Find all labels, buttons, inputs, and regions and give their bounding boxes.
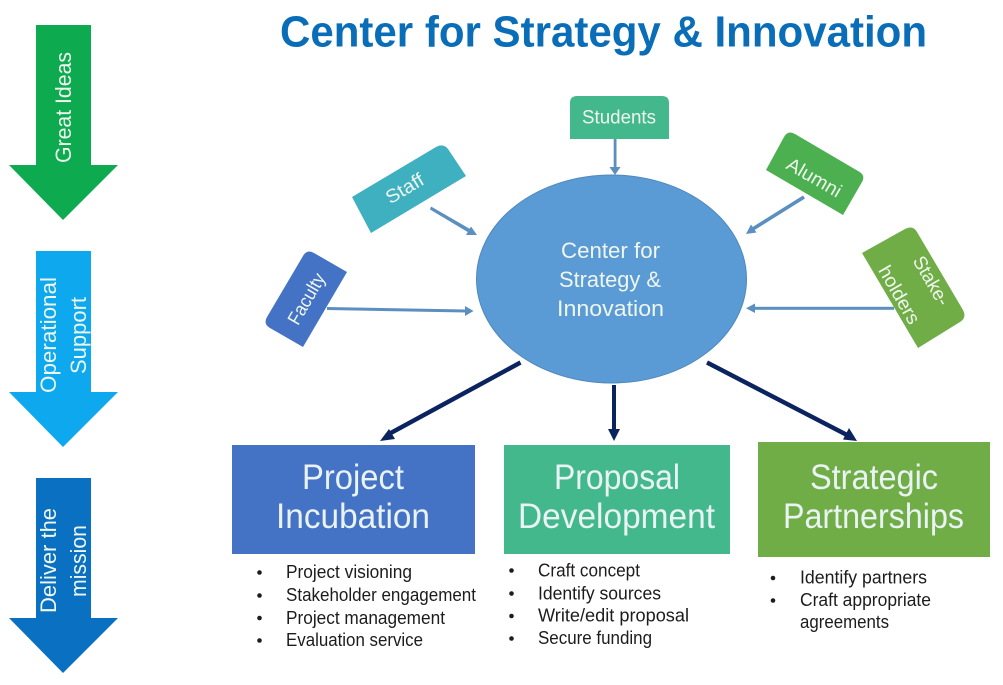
list: Project Incubation services: Stakeholder engagement: [286, 585, 476, 605]
list: Strategic Partnerships services: Identify partners: [800, 568, 927, 588]
arrow: Great Ideas: Great Ideas: [51, 52, 76, 163]
box: Students: [570, 96, 669, 139]
arrow: Staff to center: [430, 206, 477, 235]
panel: Strategic Partnerships: [758, 442, 990, 557]
panel: Project Incubation: Project: [302, 458, 404, 497]
arrow: Deliver the mission: Deliver the: [36, 508, 61, 613]
box: Alumni: Alumni: [783, 154, 845, 202]
panel: Strategic Partnerships: Partnerships: [783, 497, 964, 536]
arrow: center to Project Incubation: [380, 360, 522, 441]
arrow: Stakeholders to center: [746, 304, 894, 313]
panel: Proposal Development: Development: [518, 497, 715, 536]
list: Project Incubation services: Project visioning: [286, 562, 412, 582]
arrow: Students to center: [610, 139, 620, 175]
center ellipse: Strategy &: [559, 267, 661, 292]
arrow: center to Strategic Partnerships: [706, 360, 857, 441]
panel: Proposal Development: Proposal: [554, 458, 680, 497]
panel: Project Incubation: [232, 445, 475, 554]
arrow: Deliver the mission: [9, 478, 118, 673]
arrow: Great Ideas: [9, 25, 118, 220]
list: Strategic Partnerships services: agreements: [800, 612, 889, 632]
title: Center for Strategy & Innovation: [280, 8, 927, 56]
list: Strategic Partnerships services: [771, 568, 931, 632]
box: Stakeholders: holders: [873, 262, 924, 328]
box: Staff: [352, 145, 466, 233]
center ellipse: Innovation: [557, 296, 664, 321]
list: Project Incubation services: Project management: [286, 608, 445, 628]
center ellipse: Center for: [561, 238, 660, 263]
panel: Project Incubation: Incubation: [276, 497, 430, 536]
box: Stakeholders: Stake-: [908, 253, 953, 310]
box: Staff: Staff: [382, 169, 429, 209]
list: Proposal Development services: Craft concept: [538, 560, 640, 580]
list: Proposal Development services: [509, 560, 689, 648]
list: Proposal Development services: Secure funding: [538, 628, 652, 648]
arrow: Operational Support: [9, 251, 118, 447]
arrow: Alumni to center: [746, 196, 805, 234]
list: Proposal Development services: Write/edit proposal: [538, 606, 689, 626]
box: Alumni: [766, 133, 863, 215]
list: Project Incubation services: [257, 562, 476, 650]
panel: Strategic Partnerships: Strategic: [810, 458, 938, 497]
arrow: Operational Support: Operational: [36, 277, 61, 393]
list: Project Incubation services: Evaluation service: [286, 630, 423, 650]
arrow: Deliver the mission: mission: [66, 525, 91, 597]
box: Stakeholders: [862, 228, 964, 348]
arrow: center to Proposal Development: [608, 385, 620, 441]
box: Faculty: Faculty: [284, 269, 331, 329]
arrow: Operational Support: Support: [66, 297, 91, 374]
list: Strategic Partnerships services: Craft appropriate: [800, 590, 931, 610]
arrow: Faculty to center: [327, 306, 474, 316]
center ellipse: [476, 175, 746, 383]
panel: Proposal Development: [504, 445, 730, 554]
box: Students: Students: [582, 108, 656, 128]
box: Faculty: [266, 252, 347, 347]
list: Proposal Development services: Identify sources: [538, 584, 661, 604]
